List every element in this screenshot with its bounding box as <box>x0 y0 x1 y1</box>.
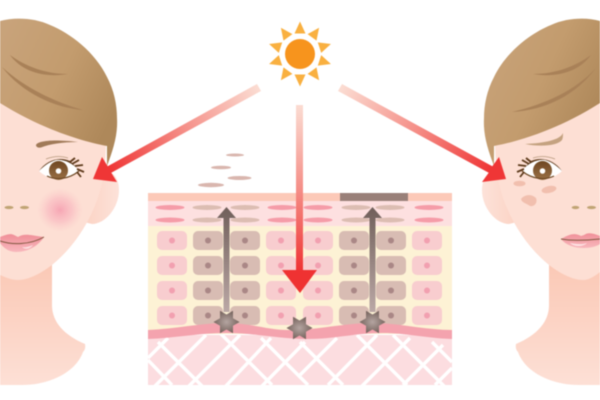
pink skin cells <box>157 231 442 325</box>
basal membrane wave <box>148 323 452 339</box>
dermis layer with collagen lattice <box>148 334 452 386</box>
pigmented skin cells <box>193 231 406 325</box>
left eye <box>39 157 84 180</box>
sun icon <box>267 22 333 86</box>
pigmented surface patch <box>340 193 408 201</box>
left ear <box>84 171 119 224</box>
melanocyte star center <box>286 317 312 339</box>
right face <box>482 19 600 385</box>
right ear <box>482 171 517 224</box>
right face skin <box>495 100 600 280</box>
pigmented cell nuclei <box>205 238 394 318</box>
arrow: sun to left face <box>93 84 261 182</box>
melanin arrow right <box>363 207 382 312</box>
melanin arrow left <box>217 207 236 312</box>
right lips <box>561 233 600 248</box>
right age spots <box>514 181 557 206</box>
flat granular cells <box>156 205 444 222</box>
melanin flakes <box>198 154 252 187</box>
left lips <box>0 234 44 252</box>
stratum corneum <box>148 193 452 201</box>
left nostrils <box>4 206 29 209</box>
melanocyte star right <box>360 311 386 333</box>
left cheek blush <box>37 188 83 232</box>
right hair <box>484 19 600 166</box>
granular layer background <box>148 201 452 226</box>
arrow: sun into skin <box>282 105 317 293</box>
left neck <box>0 262 85 385</box>
arrow: sun to right face <box>338 84 506 182</box>
pink cell nuclei <box>169 238 430 318</box>
right nostrils <box>572 206 596 209</box>
melanocyte star left <box>214 311 240 333</box>
right eyebrow <box>525 133 563 146</box>
right neck <box>516 262 600 385</box>
left face <box>0 19 119 385</box>
skin cross-section diagram <box>148 154 452 390</box>
right eye <box>517 157 562 180</box>
spinous layer background <box>148 226 452 334</box>
left eyebrow <box>36 141 78 148</box>
left hair <box>0 19 117 166</box>
left face skin <box>0 80 106 280</box>
